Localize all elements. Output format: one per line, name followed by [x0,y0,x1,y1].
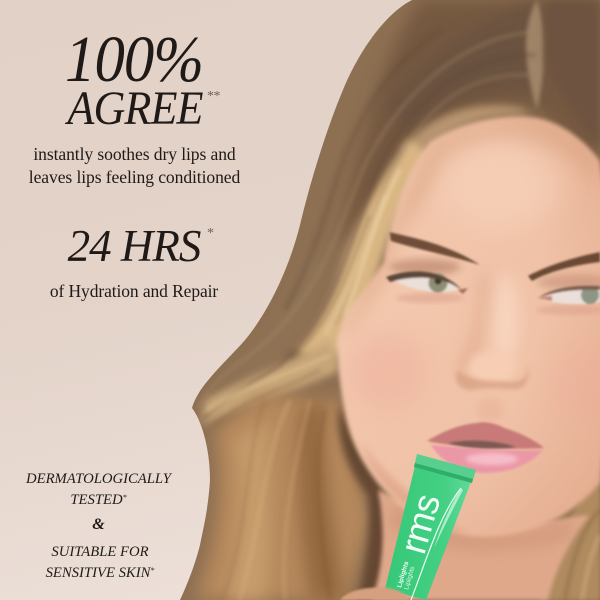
text: hydration claim: of Hydration and Repair [50,281,218,301]
face [336,114,600,538]
product tube: Liplights [403,565,417,591]
text: dermatologically tested: DERMATOLOGICALLY [26,471,171,487]
hair [180,0,600,600]
fingertip [340,588,408,600]
ampersand: & [92,516,105,533]
eye right [538,286,600,304]
eye left [386,271,468,294]
eye shadow [389,259,461,275]
text: dermatologically tested: TESTED* [70,492,127,508]
nose [456,351,528,390]
jaw shadow on neck [390,505,575,548]
under-eye shadow [396,293,464,303]
heading: 24 hrs: 24 HRS [68,221,200,271]
text: suitable for sensitive skin: SUITABLE FOR [51,544,149,560]
text: soothes claim [29,144,240,187]
text: soothes claim: instantly soothes dry lips and [33,144,236,164]
heading: agree: AGREE [67,82,203,135]
neck [372,490,590,600]
text: dermatologically tested [26,471,172,508]
brand wordmark: rms [392,489,448,558]
text: suitable for sensitive skin [46,544,154,581]
nose bridge highlight [491,275,519,365]
footnote mark: 24 hrs: * [207,226,214,241]
philtrum shading [480,402,500,418]
text: soothes claim: leaves lips feeling conditioned [29,167,240,187]
text: suitable for sensitive skin: SENSITIVE SKIN* [46,565,154,581]
product tube [385,454,476,600]
footnote marks: agree: ** [207,89,220,104]
product name: Liplights [396,560,410,589]
eyebrow right [528,252,600,281]
lips [427,422,544,473]
heading: 100%: 100% [65,23,203,96]
nose side shadow [455,275,490,380]
eyebrow left [389,232,480,265]
